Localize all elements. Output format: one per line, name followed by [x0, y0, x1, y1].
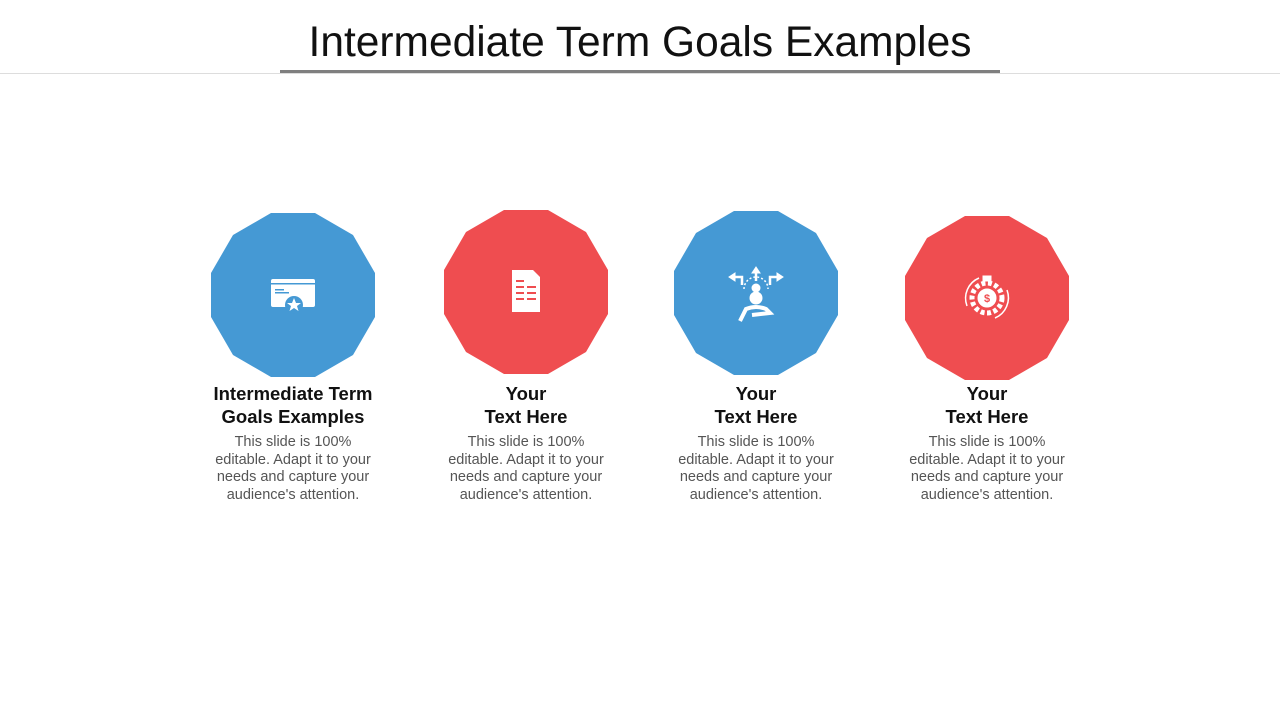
body 4: editable. Adapt it to your [909, 452, 1065, 468]
icon: red dodecagon with gear dollar: $ [984, 293, 990, 305]
heading 1 [213, 383, 372, 427]
heading 3: Text Here [715, 406, 797, 427]
text block 4 [909, 383, 1065, 503]
icon: blue dodecagon with browser star [211, 213, 375, 377]
body 1: needs and capture your [217, 469, 369, 485]
icon: blue dodecagon with hand and arrows [674, 211, 838, 375]
text block 3 [678, 383, 834, 503]
heading 2: Your [506, 383, 546, 404]
body 4: audience's attention. [921, 487, 1053, 503]
text block 1 [213, 383, 372, 503]
heading 1: Goals Examples [222, 406, 364, 427]
heading 3: Your [736, 383, 776, 404]
body 1 [215, 434, 371, 503]
body 3: needs and capture your [680, 469, 832, 485]
body 3 [678, 434, 834, 503]
body 1: This slide is 100% [235, 434, 351, 450]
heading 2 [484, 383, 567, 427]
body 4 [909, 434, 1065, 503]
title: Intermediate Term Goals Examples [309, 19, 971, 66]
heading 4 [946, 383, 1028, 427]
body 2: audience's attention. [460, 487, 592, 503]
icon: red dodecagon with gear dollar [905, 216, 1069, 380]
body 2: needs and capture your [450, 469, 602, 485]
body 2 [448, 434, 604, 503]
body 4: This slide is 100% [929, 434, 1045, 450]
body 4: needs and capture your [911, 469, 1063, 485]
icon: red dodecagon with document [444, 210, 608, 374]
text block 2 [448, 383, 604, 503]
heading 4: Your [967, 383, 1007, 404]
heading 3 [714, 383, 797, 427]
body 1: audience's attention. [227, 487, 359, 503]
body 3: editable. Adapt it to your [678, 452, 834, 468]
body 3: This slide is 100% [698, 434, 814, 450]
heading 2: Text Here [485, 406, 567, 427]
heading 4: Text Here [946, 406, 1028, 427]
body 2: editable. Adapt it to your [448, 452, 604, 468]
body 1: editable. Adapt it to your [215, 452, 371, 468]
body 2: This slide is 100% [468, 434, 584, 450]
heading 1: Intermediate Term [213, 383, 372, 404]
body 3: audience's attention. [690, 487, 822, 503]
